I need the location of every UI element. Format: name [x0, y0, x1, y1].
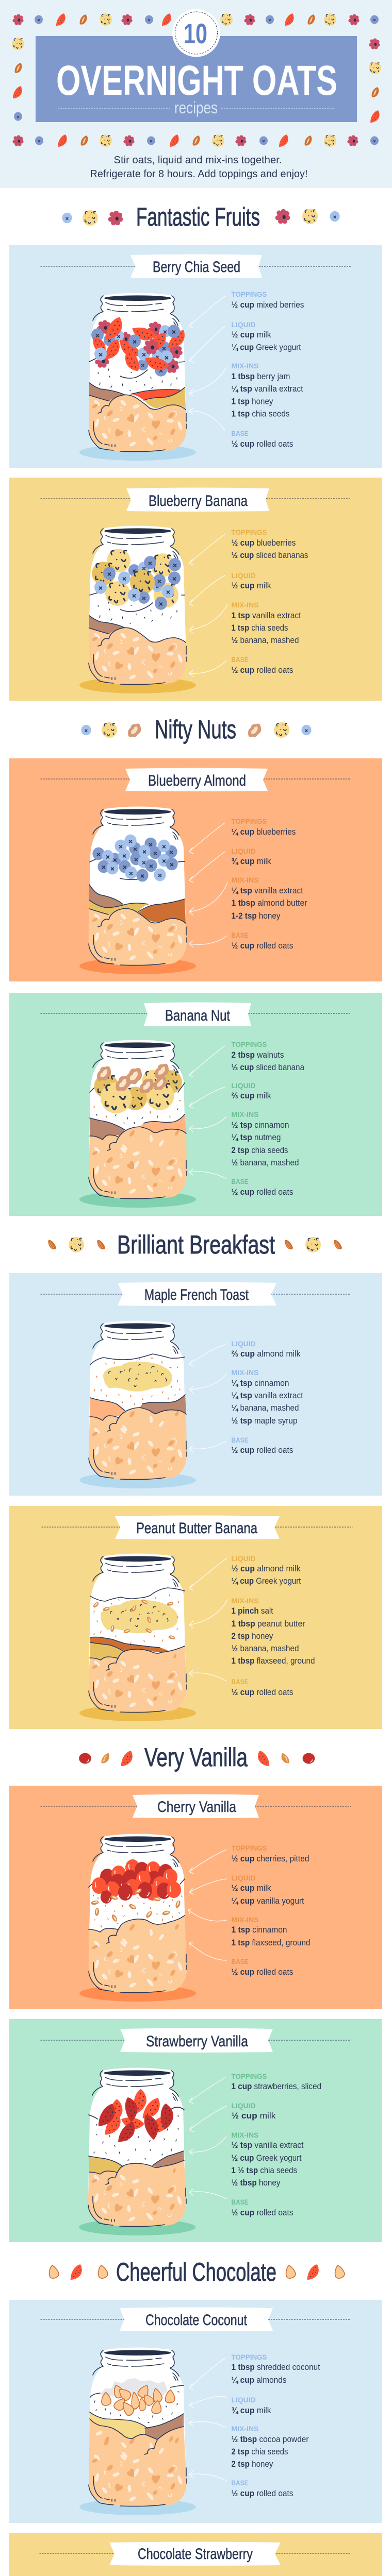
section heading: Very Vanilla: Very Vanilla [144, 1743, 248, 1772]
section heading: Brilliant Breakfast [48, 1230, 342, 1259]
almond slivers [92, 1599, 175, 1640]
ingredients list: BASE [231, 1957, 249, 1965]
ingredients list: MIX-INS [231, 1368, 259, 1377]
recipe title banner: Banana Nut [165, 1007, 231, 1024]
ingredients list [231, 1554, 315, 1697]
section heading: Brilliant Breakfast: Brilliant Breakfast [117, 1230, 275, 1259]
ingredients list: MIX-INS [231, 1110, 259, 1118]
ingredients list: LIQUID [231, 1874, 256, 1882]
panel: Cherry Vanilla [9, 1786, 382, 2009]
ingredients list: BASE [231, 1677, 249, 1686]
header background [0, 0, 392, 188]
ingredients list: ¼ tsp vanilla extract [231, 886, 303, 895]
section heading: Very Vanilla [79, 1743, 315, 1772]
ingredients list: 1 cup strawberries, sliced [231, 2081, 321, 2091]
ingredients list: ½ cup Greek yogurt [231, 2153, 302, 2163]
ingredients list: 1 tsp chia seeds [231, 409, 290, 418]
recipe title banner [41, 1516, 353, 1539]
ingredients list [231, 1340, 303, 1455]
ingredients list: ½ cup rolled oats [231, 1967, 293, 1977]
ingredients list: ½ tsp cinnamon [231, 1120, 289, 1130]
recipe title banner: Chocolate Strawberry [138, 2546, 253, 2563]
ingredients list: LIQUID [231, 2396, 256, 2404]
jar illustration [79, 2068, 195, 2235]
panel: Strawberry Vanilla [9, 2019, 382, 2242]
ingredients list: BASE [231, 2198, 249, 2206]
jar illustration [79, 1554, 196, 1721]
ingredients list: MIX-INS [231, 601, 259, 609]
ingredients list: ½ banana, mashed [231, 635, 299, 645]
ingredients list: ½ cup rolled oats [231, 439, 293, 449]
subtitle: recipes: recipes [174, 98, 218, 117]
ingredients list: 1 tsp flaxseed, ground [231, 1938, 311, 1947]
ingredients list: TOPPINGS [231, 2072, 267, 2080]
recipe title banner: Strawberry Vanilla [146, 2033, 248, 2050]
arrows [189, 534, 227, 676]
ingredients list: LIQUID [231, 571, 256, 580]
ingredients list: MIX-INS [231, 1916, 259, 1924]
ingredients list: ½ tbsp honey [231, 2178, 281, 2188]
ingredients list: ½ cup rolled oats [231, 1687, 293, 1697]
ingredients list: MIX-INS [231, 362, 259, 370]
panel: Berry Chia Seed [9, 245, 382, 468]
ingredients list: ½ tsp vanilla extract [231, 2140, 304, 2150]
decorative icon border [12, 13, 381, 147]
ingredients list: TOPPINGS [231, 1844, 267, 1852]
arrows [189, 1558, 227, 1681]
toppings: cherries [91, 1859, 181, 1922]
ingredients list: BASE [231, 655, 249, 664]
arrows [189, 823, 227, 947]
recipe title banner: Chocolate Coconut [145, 2312, 248, 2329]
intro text [90, 155, 307, 180]
panel: Banana Nut [9, 993, 382, 1216]
arrows [189, 2358, 226, 2481]
panel: Blueberry Banana [9, 478, 382, 701]
ingredients list: MIX-INS [231, 876, 259, 884]
ingredients list: ½ tbsp cocoa powder [231, 2434, 309, 2444]
ingredients list: BASE [231, 1436, 249, 1444]
ingredients list: ½ cup milk [231, 2111, 276, 2121]
toppings: mixed berries [88, 317, 186, 377]
ingredients list: 2 tsp honey [231, 2459, 273, 2469]
ingredients list: ⅓ cup sliced banana [231, 1062, 304, 1072]
ingredients list: ½ tsp maple syrup [231, 1416, 297, 1426]
ingredients list: 2 tsp chia seeds [231, 2447, 288, 2456]
ingredients list: 1 tbsp peanut butter [231, 1619, 305, 1629]
ingredients list: ½ cup cherries, pitted [231, 1854, 309, 1863]
panel: Chocolate Coconut [9, 2300, 382, 2523]
ingredients list [231, 2072, 321, 2217]
arrows [189, 1046, 226, 1179]
ingredients list: ¼ tsp vanilla extract [231, 384, 303, 394]
panel: Blueberry Almond [9, 758, 382, 981]
ingredients list: 1 tsp chia seeds [231, 623, 288, 633]
ingredients list: LIQUID [231, 320, 256, 329]
ingredients list [231, 817, 307, 951]
recipe title banner [40, 1282, 351, 1306]
ingredients list: ¾ cup milk [231, 2405, 271, 2415]
ingredients list: ⅔ cup almond milk [231, 1349, 301, 1359]
recipe title banner [40, 2028, 351, 2053]
ingredients list: ½ cup almond milk [231, 1564, 301, 1573]
recipe title banner [40, 255, 351, 278]
ingredients list [231, 290, 304, 449]
ingredients list: ¼ tsp vanilla extract [231, 1391, 303, 1400]
toppings: blueberries and bananas [92, 549, 181, 610]
ingredients list: TOPPINGS [231, 528, 267, 536]
ingredients list: LIQUID [231, 1554, 256, 1563]
recipe title banner: Blueberry Banana [149, 493, 248, 510]
ingredients list: 2 tbsp walnuts [231, 1050, 284, 1060]
ingredients list: ½ cup rolled oats [231, 1445, 293, 1455]
ingredients list: 2 tsp honey [231, 1631, 273, 1641]
recipe title banner [40, 2307, 351, 2331]
ingredients list: ½ cup rolled oats [231, 1187, 293, 1197]
ingredients list: 1 tbsp berry jam [231, 371, 290, 381]
section heading: Cheerful Chocolate: Cheerful Chocolate [116, 2258, 276, 2286]
ingredients list: ½ banana, mashed [231, 1158, 299, 1167]
ingredients list [231, 2353, 320, 2498]
recipe title banner [40, 487, 351, 512]
ingredients list: ½ banana, mashed [231, 1643, 299, 1653]
ingredients list: BASE [231, 1177, 249, 1185]
ingredients list: LIQUID [231, 1340, 256, 1348]
jar illustration [79, 2347, 196, 2515]
number badge [172, 9, 220, 57]
arrows [188, 1850, 226, 1960]
ingredients list: BASE [231, 2479, 249, 2487]
toppings: almonds and coconut [101, 2384, 177, 2416]
intro text: Refrigerate for 8 hours. Add toppings and enjoy! [90, 168, 307, 180]
ingredients list: 1 tsp vanilla extract [231, 611, 301, 620]
ingredients list: 1 tbsp almond butter [231, 898, 307, 908]
title banner [36, 36, 357, 122]
recipe title banner: Blueberry Almond [148, 772, 246, 789]
ingredients list: MIX-INS [231, 2131, 259, 2139]
ingredients list: ½ cup mixed berries [231, 300, 304, 310]
ingredients list: 1 ½ tsp chia seeds [231, 2165, 297, 2175]
ingredients list: ⅔ cup milk [231, 1091, 271, 1100]
jar illustration [79, 526, 196, 693]
ingredients list: ¼ cup vanilla yogurt [231, 1896, 304, 1906]
arrows [189, 296, 226, 430]
ingredients list: LIQUID [231, 2102, 256, 2110]
ingredients list: 1 tsp cinnamon [231, 1925, 287, 1935]
ingredients list: TOPPINGS [231, 290, 267, 298]
ingredients list: TOPPINGS [231, 2353, 267, 2361]
ingredients list: 1 tsp honey [231, 397, 273, 406]
ingredients list: ¼ cup blueberries [231, 827, 296, 837]
number badge: 10 [184, 18, 207, 49]
recipe title banner: Berry Chia Seed [153, 259, 240, 276]
ingredients list: MIX-INS [231, 1597, 259, 1605]
recipe title banner [40, 1794, 351, 1818]
recipe title banner: Maple French Toast [144, 1286, 249, 1303]
ingredients list: ½ cup milk [231, 330, 271, 340]
toppings: walnuts and banana [94, 1064, 182, 1113]
jar illustration [79, 1321, 196, 1488]
panel: Chocolate Strawberry [9, 2533, 382, 2576]
ingredients list [231, 1844, 311, 1977]
ingredients list [231, 528, 308, 675]
intro text: Stir oats, liquid and mix-ins together. [113, 155, 282, 166]
panel: Peanut Butter Banana [9, 1506, 382, 1729]
arrows [189, 2077, 226, 2199]
recipe title banner: Cherry Vanilla [157, 1799, 236, 1816]
ingredients list: ½ cup rolled oats [231, 665, 293, 675]
ingredients list: 1 tbsp shredded coconut [231, 2362, 320, 2372]
arrows [189, 1345, 226, 1452]
ingredients list: MIX-INS [231, 2425, 259, 2433]
section heading: Fantastic Fruits: Fantastic Fruits [136, 202, 260, 231]
ingredients list: LIQUID [231, 1081, 256, 1090]
ingredients list: ¼ tsp nutmeg [231, 1132, 281, 1142]
ingredients list: LIQUID [231, 847, 256, 855]
ingredients list: BASE [231, 931, 249, 939]
ingredients list: 2 tsp chia seeds [231, 1145, 288, 1155]
recipe title banner [40, 1003, 351, 1026]
ingredients list: ¼ cup almonds [231, 2375, 287, 2385]
recipe title banner [40, 768, 351, 791]
ingredients list: ½ cup blueberries [231, 538, 296, 548]
ingredients list: ½ cup milk [231, 1883, 271, 1893]
ingredients list: BASE [231, 429, 249, 437]
recipe title banner: Peanut Butter Banana [136, 1520, 257, 1537]
ingredients list: ¾ cup milk [231, 856, 271, 866]
ingredients list: TOPPINGS [231, 1040, 267, 1048]
ingredients list: ¼ banana, mashed [231, 1403, 299, 1413]
ingredients list [231, 1040, 304, 1197]
ingredients list: 1-2 tsp honey [231, 911, 281, 921]
ingredients list: ½ cup rolled oats [231, 2208, 293, 2217]
recipe title banner [39, 2542, 351, 2566]
section heading: Nifty Nuts: Nifty Nuts [155, 715, 236, 744]
section heading: Nifty Nuts [81, 715, 312, 744]
ingredients list: ½ cup milk [231, 581, 271, 590]
ingredients list: ½ cup rolled oats [231, 941, 293, 951]
ingredients list: ½ cup sliced bananas [231, 550, 308, 560]
jar illustration [79, 1834, 196, 2002]
jar illustration [79, 293, 196, 461]
jar illustration [79, 1040, 196, 1208]
ingredients list: ½ cup rolled oats [231, 2488, 293, 2498]
toppings: blueberries [92, 835, 178, 882]
section heading: Fantastic Fruits [62, 202, 340, 231]
panel: Maple French Toast [9, 1273, 382, 1496]
ingredients list: ¼ tsp cinnamon [231, 1378, 289, 1388]
ingredients list: ¼ cup Greek yogurt [231, 342, 301, 352]
ingredients list: 1 pinch salt [231, 1606, 273, 1616]
jar illustration [79, 807, 196, 974]
ingredients list: TOPPINGS [231, 817, 267, 825]
ingredients list: ¼ cup Greek yogurt [231, 1576, 301, 1586]
ingredients list: 1 tbsp flaxseed, ground [231, 1656, 315, 1666]
toppings: strawberries [99, 2088, 178, 2143]
